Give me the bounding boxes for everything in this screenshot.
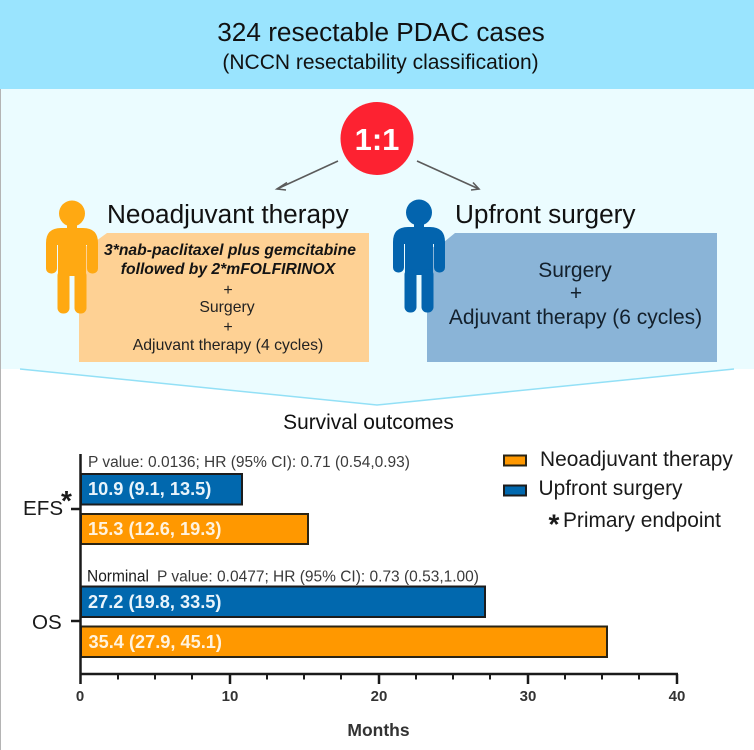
- legend: Neoadjuvant therapy: [540, 448, 733, 471]
- legend: neoadjuvant: [504, 456, 526, 466]
- x axis title: Months: [347, 720, 410, 740]
- bar values: 10.9 (9.1, 13.5): [88, 479, 211, 499]
- bar: OS neoadjuvant: [81, 626, 607, 657]
- bar chart: 15.3 (12.6, 19.3): [88, 519, 221, 539]
- icon: orange person: [46, 200, 98, 314]
- arrow: to neoadjuvant: [277, 161, 338, 190]
- panel: neoadjuvant regimen: [79, 233, 369, 362]
- panel: upfront surgery regimen: Adjuvant therapy (6 cycles): [449, 306, 702, 329]
- bar chart: OS: [32, 611, 62, 634]
- x axis numbers: 20: [371, 688, 387, 705]
- axes: [71, 454, 678, 684]
- x axis numbers: 30: [520, 688, 536, 705]
- legend: primary endpoint: *: [548, 508, 560, 540]
- icon: blue person: [393, 200, 445, 312]
- panel: header band: [0, 0, 754, 89]
- plus and surgery: +: [223, 282, 233, 299]
- subtitle: (NCCN resectability classification): [222, 51, 539, 74]
- x axis numbers: 40: [669, 688, 685, 705]
- OS statistics: Norminal: [87, 568, 149, 586]
- legend: Primary endpoint: [563, 509, 721, 532]
- bar: EFS upfront: [81, 474, 242, 504]
- randomization circle: [340, 102, 414, 175]
- minor ticks: [118, 674, 639, 680]
- chevron outline: [20, 369, 734, 405]
- panel: neoadjuvant regimen: Adjuvant therapy (4 cycles): [133, 337, 323, 354]
- heading: neoadjuvant therapy: Neoadjuvant therapy: [107, 199, 350, 229]
- panel: upfront surgery regimen: Surgery: [538, 259, 612, 282]
- panel: neoadjuvant regimen: followed by 2*mFOLFIRINOX: [121, 261, 337, 278]
- arrow: to upfront surgery: [417, 161, 479, 190]
- panel: upfront surgery regimen: +: [570, 282, 582, 305]
- x axis numbers: 10: [222, 688, 238, 705]
- bar chart: 35.4 (27.9, 45.1): [88, 632, 222, 652]
- panel: neoadjuvant regimen: +: [223, 319, 233, 336]
- bar chart: 27.2 (19.8, 33.5): [88, 592, 221, 612]
- regimen drugs: 3*nab-paclitaxel plus gemcitabine: [104, 242, 356, 259]
- heading: survival outcomes: Survival outcomes: [283, 411, 454, 434]
- legend: Upfront surgery: [538, 477, 683, 500]
- bar chart: [23, 454, 685, 740]
- panel: randomization background: [0, 89, 754, 405]
- EFS statistics: P value: 0.0136; HR (95% CI): 0.71 (0.54,0.93): [88, 454, 410, 471]
- title: 324 resectable PDAC cases: [217, 17, 545, 47]
- left edge line: [0, 89, 1, 750]
- bar chart: P value: 0.0477; HR (95% CI): 0.73 (0.53,1.00): [157, 568, 479, 586]
- category labels: EFS: [23, 497, 63, 520]
- heading: upfront surgery: Upfront surgery: [455, 199, 636, 229]
- bar: OS upfront: [81, 586, 485, 617]
- randomization circle: 1:1: [355, 122, 399, 157]
- panel: upfront surgery regimen: [427, 233, 717, 362]
- legend: [504, 448, 733, 540]
- x axis numbers: 0: [76, 688, 84, 705]
- bar chart: *: [61, 485, 72, 516]
- x axis numbers: [76, 688, 685, 705]
- legend: upfront: [504, 486, 526, 496]
- bar: EFS neoadjuvant: [81, 514, 308, 544]
- panel: neoadjuvant regimen: Surgery: [199, 299, 255, 316]
